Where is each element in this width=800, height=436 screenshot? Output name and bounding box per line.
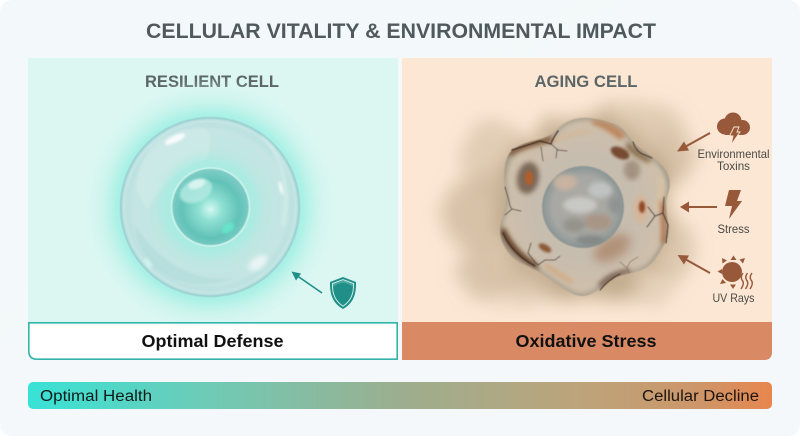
label bar: oxidative stress	[402, 322, 772, 360]
icon: toxic cloud	[717, 112, 750, 145]
cracks	[503, 131, 668, 290]
icon: shield	[330, 277, 356, 309]
gradient scale bar: Optimal Health	[40, 388, 152, 405]
title: CELLULAR VITALITY & ENVIRONMENTAL IMPACT	[146, 19, 656, 43]
label bar: optimal defense: Optimal Defense	[142, 331, 284, 351]
arrow: uv	[678, 255, 710, 273]
icon: lightning bolt	[725, 190, 742, 219]
panel: aging cell	[402, 58, 772, 322]
icon: uv sun	[718, 256, 752, 290]
label bar: optimal defense	[29, 323, 397, 359]
smoke cloud	[444, 102, 696, 306]
aged nucleus	[542, 166, 624, 248]
label: uv rays: UV Rays	[712, 291, 755, 305]
label bar: oxidative stress: Oxidative Stress	[516, 331, 657, 351]
label: environmental toxins: Environmental	[698, 147, 770, 161]
arrow: toxins	[677, 133, 710, 152]
nucleus	[160, 157, 260, 257]
heading: resilient cell: RESILIENT CELL	[145, 73, 279, 91]
label: toxins: Toxins	[717, 159, 750, 173]
panel: resilient cell	[28, 58, 398, 337]
label: stress: Stress	[718, 222, 750, 236]
gradient scale bar: Cellular Decline	[642, 388, 759, 405]
damaged cell illustration	[500, 118, 670, 296]
rust patches	[500, 120, 666, 288]
heading: aging cell: AGING CELL	[534, 73, 638, 91]
arrow: stress	[680, 202, 717, 212]
arrow: shield to cell	[292, 272, 322, 293]
gradient scale bar	[28, 382, 772, 409]
healthy cell illustration	[96, 79, 324, 321]
